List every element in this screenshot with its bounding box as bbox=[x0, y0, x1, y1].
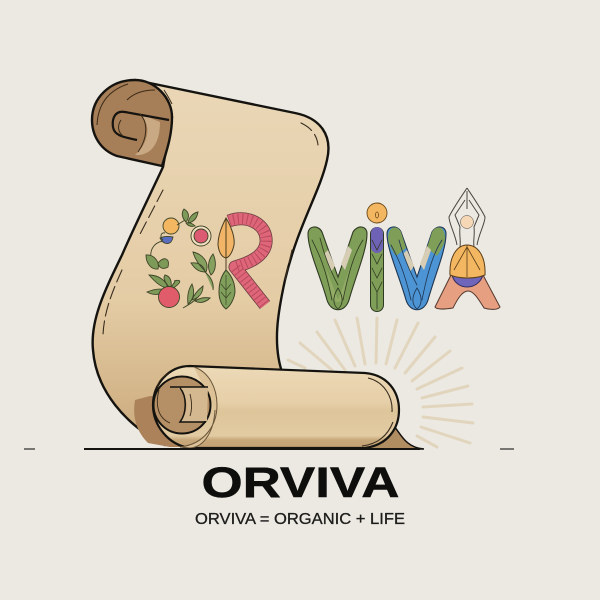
herb sprig bbox=[183, 284, 210, 308]
red berry bbox=[158, 286, 180, 308]
botanical O bbox=[146, 209, 215, 308]
figure head bbox=[460, 216, 474, 228]
V two bbox=[387, 227, 446, 310]
figure arms bbox=[449, 188, 485, 247]
roll tail bbox=[365, 425, 424, 449]
top roll bbox=[92, 80, 172, 166]
orange circle bbox=[163, 218, 179, 234]
V one bbox=[308, 227, 367, 310]
green leaf bbox=[219, 270, 235, 309]
scroll sheet bbox=[93, 80, 328, 445]
figure torso bbox=[450, 245, 485, 278]
baseline bbox=[84, 448, 420, 450]
I bbox=[372, 233, 382, 309]
tagline: ORVIVA = ORGANIC + LIFE bbox=[195, 511, 405, 528]
roll fine lines bbox=[97, 84, 172, 152]
botanical R bbox=[218, 218, 266, 309]
yoga figure bbox=[435, 188, 500, 309]
right dash bbox=[500, 448, 514, 450]
roll inner band bbox=[135, 113, 160, 155]
sheet lower shadow bbox=[134, 396, 200, 447]
roll end cap bbox=[154, 376, 210, 434]
R pink strokes bbox=[229, 219, 266, 305]
top leaves bbox=[182, 209, 198, 226]
pink circle bbox=[191, 226, 211, 246]
vine bbox=[151, 220, 185, 258]
spiral fine lines bbox=[157, 373, 192, 423]
bottom roll bbox=[153, 366, 424, 449]
sun rays bbox=[288, 318, 473, 447]
left leaves bbox=[146, 255, 168, 269]
roll end ring bbox=[180, 367, 217, 448]
inner spiral band bbox=[178, 387, 208, 422]
R hatching bbox=[229, 219, 266, 305]
inner spiral bbox=[170, 387, 208, 422]
leaf midline bbox=[225, 218, 227, 270]
scroll bbox=[92, 80, 424, 449]
roll cylinder bbox=[153, 366, 399, 448]
orange dot bbox=[367, 203, 387, 223]
roll spiral bbox=[113, 112, 169, 140]
torso lines bbox=[454, 245, 480, 277]
green leaf veins bbox=[221, 275, 231, 305]
sheet dashed highlights bbox=[103, 123, 318, 335]
VIVA letters bbox=[308, 188, 500, 310]
berry leaves bbox=[147, 275, 180, 294]
middle leaves bbox=[191, 252, 215, 290]
figure bowl bbox=[452, 275, 483, 287]
roll right detail bbox=[362, 378, 393, 446]
figure legs bbox=[435, 275, 500, 309]
blue berry bbox=[160, 236, 173, 244]
orange leaf bbox=[218, 218, 234, 258]
roll body bbox=[92, 80, 172, 166]
left dash bbox=[24, 448, 35, 450]
brand name: ORVIVA bbox=[202, 459, 400, 507]
